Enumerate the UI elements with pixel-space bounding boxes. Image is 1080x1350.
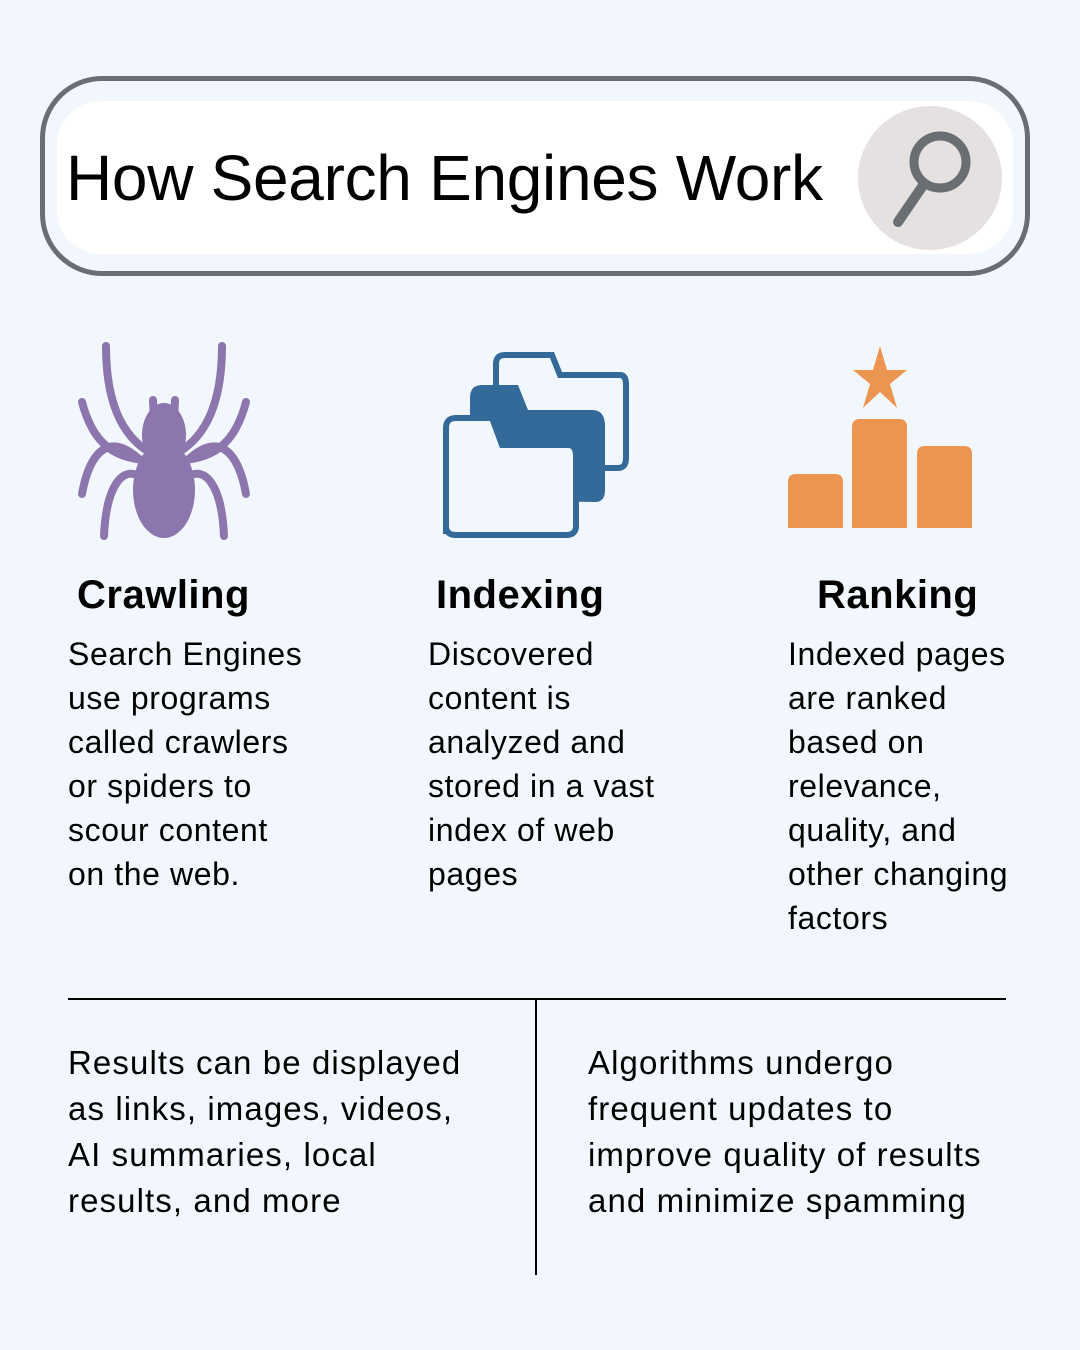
text: algorithms: improve quality of results <box>588 1136 982 1173</box>
text: results <box>68 1044 461 1219</box>
text: crawling: use programs <box>68 680 271 716</box>
text: ranking: are ranked <box>788 680 947 716</box>
text: results: Results can be displayed <box>68 1044 461 1081</box>
text: results: as links, images, videos, <box>68 1090 453 1127</box>
text: ranking: quality, and <box>788 812 956 848</box>
text: crawling <box>68 636 302 892</box>
icon: magnifier <box>858 106 1002 250</box>
title: How Search Engines Work <box>66 142 823 214</box>
icon: folders <box>443 352 629 538</box>
text: crawling: Search Engines <box>68 636 302 672</box>
text: ranking: relevance, <box>788 768 942 804</box>
text: ranking: factors <box>788 900 888 936</box>
heading: Crawling: Crawling <box>77 573 250 617</box>
text: crawling: or spiders to <box>68 768 252 804</box>
text: ranking: other changing <box>788 856 1008 892</box>
text: indexing: Discovered <box>428 636 594 672</box>
text: crawling: on the web. <box>68 856 240 892</box>
heading: Ranking: Ranking <box>817 573 978 617</box>
search bar header <box>40 76 1030 276</box>
text: indexing: analyzed and <box>428 724 626 760</box>
text: indexing: index of web <box>428 812 615 848</box>
text: results: results, and more <box>68 1182 342 1219</box>
text: ranking: Indexed pages <box>788 636 1006 672</box>
text: crawling: called crawlers <box>68 724 289 760</box>
text: algorithms <box>588 1044 982 1219</box>
text: indexing <box>428 636 655 892</box>
text: ranking <box>788 636 1008 936</box>
heading: Indexing: Indexing <box>436 573 604 617</box>
icon: ranking bars with star <box>788 346 972 528</box>
text: results: AI summaries, local <box>68 1136 377 1173</box>
text: indexing: pages <box>428 856 518 892</box>
text: indexing: content is <box>428 680 571 716</box>
text: algorithms: and minimize spamming <box>588 1182 967 1219</box>
text: indexing: stored in a vast <box>428 768 655 804</box>
text: ranking: based on <box>788 724 924 760</box>
inner white field <box>57 101 1013 254</box>
text: algorithms: Algorithms undergo <box>588 1044 894 1081</box>
text: crawling: scour content <box>68 812 268 848</box>
text: algorithms: frequent updates to <box>588 1090 893 1127</box>
icon: spider <box>78 342 250 540</box>
